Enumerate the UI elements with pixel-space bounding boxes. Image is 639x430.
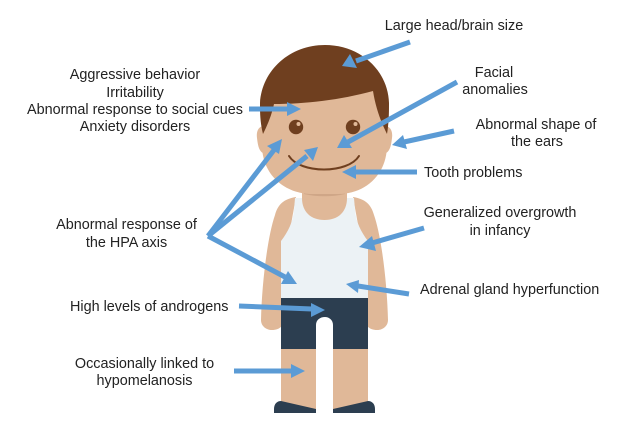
hair <box>260 45 389 134</box>
label: androgens: High levels of androgens <box>70 299 228 315</box>
arrow: to head <box>342 42 410 68</box>
smile <box>289 156 359 170</box>
neck <box>302 185 347 220</box>
arrow: to ear <box>392 131 454 149</box>
label: hypomelanosis: Occasionally linked to <box>75 356 214 372</box>
label: HPA axis: Abnormal response of <box>56 217 198 233</box>
label: ears <box>476 117 597 150</box>
arrow: HPA to cheek <box>208 139 282 236</box>
label: ears: Abnormal shape of <box>476 117 597 133</box>
face <box>262 80 387 194</box>
right eye <box>346 120 360 134</box>
label: tooth problems: Tooth problems <box>424 165 522 181</box>
arrow: to overgrowth torso <box>359 228 424 251</box>
label: HPA axis: the HPA axis <box>86 235 167 251</box>
left ear <box>257 126 272 154</box>
illustration: boy figure <box>257 45 392 413</box>
label: ears: the ears <box>511 134 563 150</box>
label: HPA axis <box>56 217 198 251</box>
right shoe <box>333 401 375 413</box>
label: behaviour list: Irritability <box>106 85 165 101</box>
right arm <box>353 197 388 330</box>
label: behaviour list: Aggressive behavior <box>70 67 200 83</box>
left arm <box>261 197 296 330</box>
label: adrenal: Adrenal gland hyperfunction <box>420 282 599 298</box>
label: facial anomalies <box>462 65 528 98</box>
shorts <box>281 298 368 349</box>
arrow: to leg <box>234 364 305 378</box>
label: hypomelanosis: hypomelanosis <box>96 373 192 389</box>
arrow: to adrenal <box>346 280 409 294</box>
left eye <box>289 120 303 134</box>
label: large head: Large head/brain size <box>385 18 523 34</box>
arrow: to mouth <box>342 165 417 179</box>
arrow: to face <box>337 82 457 148</box>
undershirt <box>281 198 368 298</box>
label: overgrowth <box>424 205 576 239</box>
label: facial anomalies: anomalies <box>462 82 528 98</box>
label: hypomelanosis <box>75 356 214 389</box>
neck shadow <box>304 192 345 196</box>
left shoe <box>274 401 316 413</box>
arrow: HPA to face <box>208 147 318 236</box>
label: overgrowth: Generalized overgrowth <box>424 205 576 221</box>
label: overgrowth: in infancy <box>470 223 531 239</box>
arrow: to forehead <box>249 102 301 116</box>
label: behaviour list: Anxiety disorders <box>80 119 190 135</box>
arrow: HPA to torso <box>208 236 297 284</box>
label: facial anomalies: Facial <box>475 65 513 81</box>
right ear <box>377 126 392 154</box>
label: behaviour list: Abnormal response to social cues <box>27 102 243 118</box>
label: behaviour list <box>27 67 243 135</box>
legs <box>281 345 368 411</box>
arrow: to shorts <box>239 303 325 317</box>
